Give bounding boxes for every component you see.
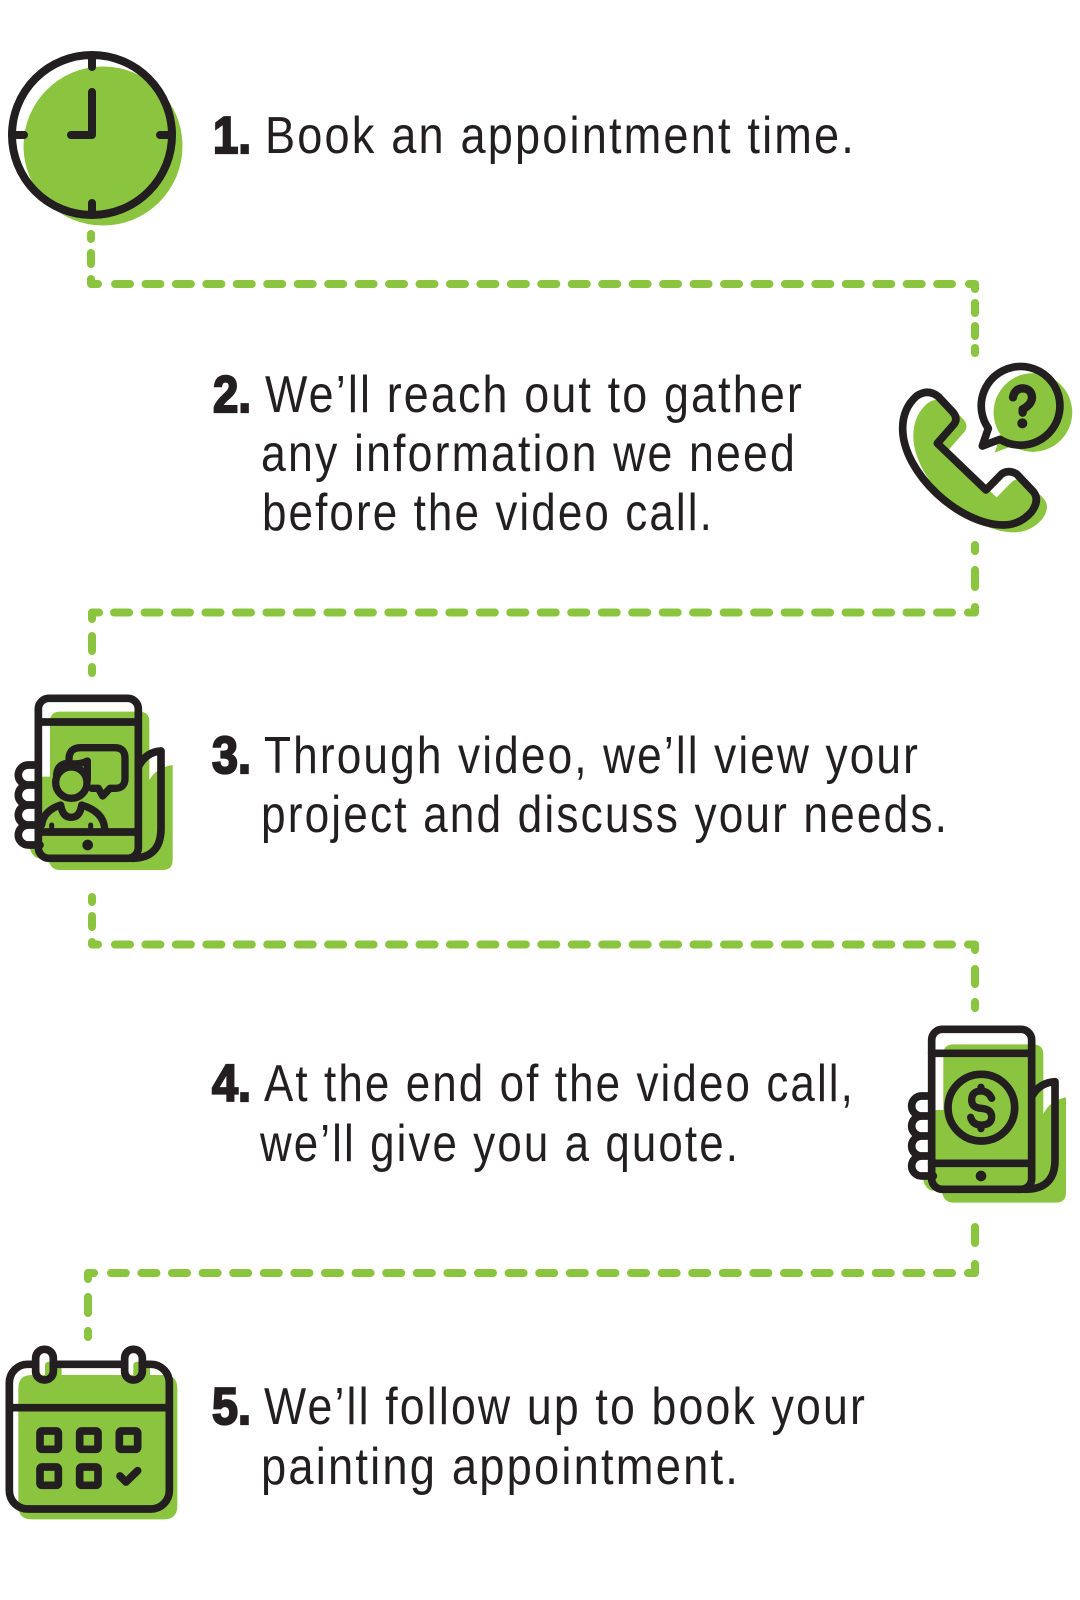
step 5 text: We’ll follow up to book your: [264, 1378, 867, 1436]
step 1 text: 1.: [213, 107, 251, 165]
step 3 text: 3.: [212, 727, 251, 785]
step 2 text: [213, 366, 804, 542]
icon: video call on smartphone: [18, 698, 173, 870]
icon: calendar: [9, 1349, 177, 1519]
step 2 text: We’ll reach out to gather: [265, 366, 804, 424]
connector: step 4 to step 5: [88, 1227, 975, 1337]
step 5 text: 5.: [212, 1378, 251, 1436]
icon: telephone with question bubble: [903, 366, 1072, 532]
step 4 text: we’ll give you a quote.: [259, 1115, 740, 1173]
step 3 text: [212, 727, 949, 844]
connector: step 1 to step 2: [91, 234, 975, 353]
icon: clock: [12, 55, 182, 226]
step 1 text: Book an appointment time.: [265, 107, 856, 165]
step 4 text: 4.: [212, 1055, 251, 1113]
connector: step 3 to step 4: [92, 897, 975, 1008]
step 2 text: before the video call.: [262, 484, 714, 542]
step 4 text: [212, 1055, 855, 1173]
step 5 text: painting appointment.: [261, 1438, 740, 1496]
icon: payment on smartphone: [912, 1029, 1066, 1203]
step 3 text: Through video, we’ll view your: [264, 727, 920, 785]
step 4 text: At the end of the video call,: [264, 1055, 855, 1113]
step 5 text: [212, 1378, 867, 1496]
connector: step 2 to step 3: [92, 545, 975, 673]
step 3 text: project and discuss your needs.: [261, 786, 949, 844]
step 2 text: 2.: [213, 366, 251, 424]
step 2 text: any information we need: [261, 425, 797, 483]
